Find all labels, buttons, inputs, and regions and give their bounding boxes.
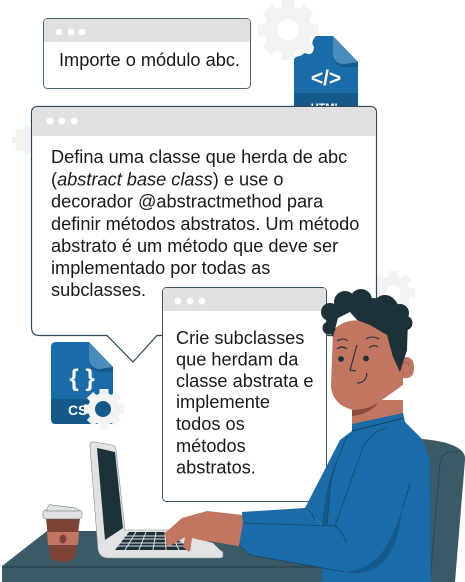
sleeve lines bbox=[239, 483, 410, 572]
window dots bbox=[175, 298, 205, 304]
icon: CSS file with gear: { } bbox=[69, 365, 95, 392]
panel: abstract class step: implementado por todas as bbox=[51, 258, 270, 278]
eyes and brows bbox=[337, 337, 379, 383]
step text: Importe o módulo abc. bbox=[59, 50, 240, 70]
panel: import step bbox=[44, 18, 250, 88]
icon: HTML file bbox=[294, 36, 358, 114]
panel: subclass step bbox=[162, 288, 326, 502]
step text: Defina uma classe que herda de abc bbox=[51, 147, 347, 167]
panel: abstract class step: decorador @abstractmethod para bbox=[51, 192, 324, 212]
panel header bbox=[32, 107, 376, 136]
laptop bbox=[90, 442, 223, 558]
screen bbox=[97, 448, 123, 540]
icon: CSS file with gear: CSS bbox=[68, 402, 97, 418]
jaw shadow bbox=[352, 402, 379, 416]
ear bbox=[401, 357, 414, 378]
icon: background gear top bbox=[258, 0, 318, 60]
face bbox=[331, 320, 403, 410]
panel header bbox=[163, 288, 326, 311]
panel: subclass step: que herdam da bbox=[176, 350, 299, 370]
gear bbox=[84, 389, 124, 429]
icon: HTML file: </> bbox=[311, 67, 341, 90]
icon: CSS file with gear bbox=[51, 342, 124, 429]
panel: abstract class step: (abstract base class) e use o bbox=[51, 170, 284, 190]
panel: abstract class step: abstrato é um método que deve ser bbox=[51, 236, 338, 256]
collar line bbox=[352, 418, 404, 431]
wrist rest bbox=[190, 538, 223, 553]
panel: abstract class step: subclasses. bbox=[51, 280, 146, 300]
hair bbox=[321, 289, 412, 372]
panel: subclass step: todos os bbox=[176, 414, 245, 434]
neck bbox=[352, 400, 403, 430]
keyboard bbox=[115, 532, 192, 550]
panel: subclass step: implemente bbox=[176, 392, 270, 412]
hand bbox=[165, 511, 243, 552]
chair bbox=[422, 439, 465, 582]
sleeve shadow bbox=[345, 510, 402, 573]
icon: HTML file: HTML bbox=[311, 102, 342, 114]
panel: subclass step: abstratos. bbox=[176, 458, 256, 478]
panel header bbox=[44, 19, 250, 42]
step text: Crie subclasses bbox=[176, 328, 304, 348]
sleeve bbox=[239, 483, 410, 572]
panel: abstract class step bbox=[32, 106, 376, 362]
panel: subclass step: classe abstrata e bbox=[176, 371, 314, 391]
panel: subclass step: métodos bbox=[176, 436, 246, 456]
desk bbox=[2, 531, 330, 582]
shirt fold bbox=[322, 428, 387, 526]
panel: abstract class step: definir métodos abstratos. Um método bbox=[51, 214, 359, 234]
icon: background gear right bbox=[371, 271, 415, 315]
window dots bbox=[46, 118, 78, 124]
icon: coffee cup bbox=[43, 504, 82, 562]
icon: background gear left bbox=[12, 125, 42, 155]
torso bbox=[305, 413, 431, 582]
window dots bbox=[56, 29, 85, 35]
person bbox=[165, 289, 431, 582]
